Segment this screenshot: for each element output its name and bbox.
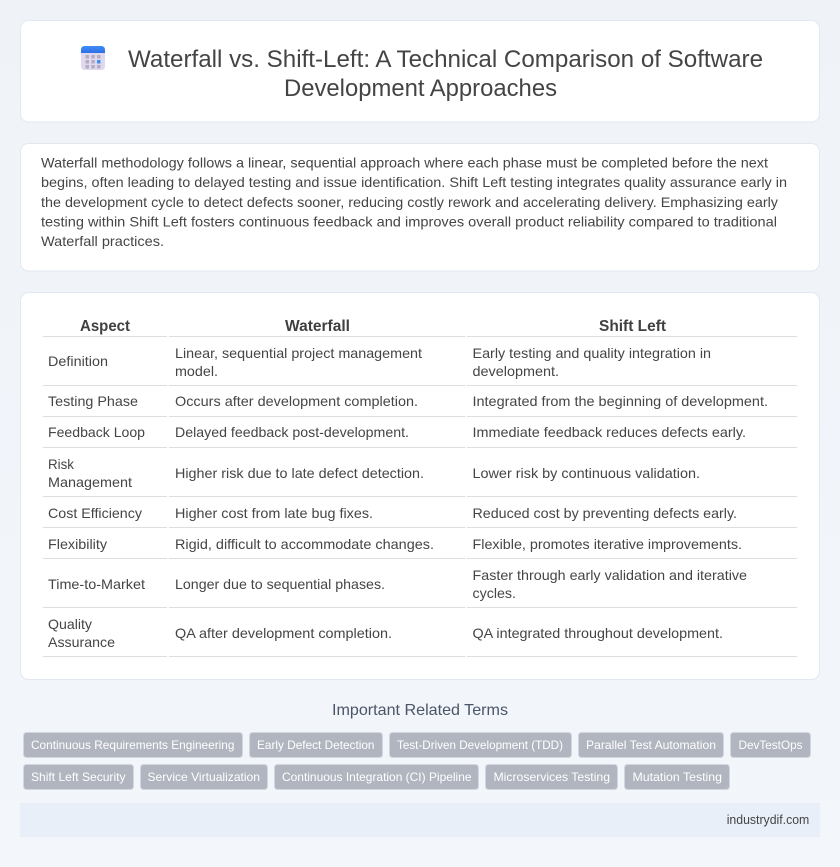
title: Waterfall vs. Shift-Left: A Technical Comparison of Software — [128, 46, 763, 73]
tag — [390, 732, 572, 758]
row: Definition: Early testing and quality integration in — [472, 345, 711, 361]
row: Risk Management — [48, 456, 700, 490]
row: Flexibility: Flexible, promotes iterative improvements. — [472, 536, 742, 552]
row: Time-to-Market — [48, 567, 747, 601]
title: Development Approaches — [284, 75, 557, 102]
row: Testing Phase: Testing Phase — [48, 393, 138, 409]
table header: Shift Left — [599, 318, 667, 335]
row: Flexibility: Rigid, difficult to accommodate changes. — [175, 536, 434, 552]
row: Quality Assurance: Assurance — [48, 634, 115, 650]
row: Definition: Definition — [48, 353, 108, 369]
row: Definition: model. — [175, 363, 218, 379]
row: Risk Management: Higher risk due to late defect detection. — [175, 465, 424, 481]
tag: DevTestOps — [738, 738, 802, 752]
row: Feedback Loop: Feedback Loop — [48, 424, 145, 440]
row: Quality Assurance: QA integrated throughout development. — [472, 625, 723, 641]
panel: introduction text: the development cycle to detect defects sooner, reducing costly rework and accelerating delivery. Emphasizing early — [41, 194, 778, 210]
panel: introduction text: begins, often leading to delayed testing and issue identification. Shift Left testing integrates quality assurance early in — [41, 174, 787, 190]
tag — [274, 764, 478, 790]
row: Definition: development. — [472, 363, 559, 379]
panel: introduction text — [20, 144, 820, 271]
tag: Mutation Testing — [632, 770, 722, 784]
tag: Service Virtualization — [148, 770, 260, 784]
row: Cost Efficiency: Reduced cost by preventing defects early. — [472, 505, 737, 521]
row: Cost Efficiency — [48, 505, 737, 521]
tag — [578, 732, 724, 758]
row: Definition — [48, 345, 711, 379]
tag: Microservices Testing — [494, 770, 610, 784]
row: Cost Efficiency: Cost Efficiency — [48, 505, 142, 521]
row: Feedback Loop: Delayed feedback post-development. — [175, 424, 409, 440]
tag: Early Defect Detection — [257, 738, 374, 752]
row: Risk Management: Management — [48, 474, 132, 490]
row: Feedback Loop: Immediate feedback reduces defects early. — [472, 424, 746, 440]
icon: calendar — [81, 46, 105, 70]
footer — [20, 803, 820, 837]
panel: introduction text: testing within Shift Left fosters continuous feedback and improves overall product reliability compared to traditional — [41, 214, 777, 230]
row: Testing Phase — [48, 393, 768, 409]
panel: comparison table — [20, 292, 820, 680]
table header: Aspect — [80, 318, 131, 335]
tag: Test-Driven Development (TDD) — [397, 738, 563, 752]
row: Quality Assurance — [48, 616, 723, 650]
tag: Shift Left Security — [31, 770, 126, 784]
tag: Parallel Test Automation — [586, 738, 716, 752]
row: Testing Phase: Occurs after development completion. — [175, 393, 418, 409]
row: Quality Assurance: Quality — [48, 616, 92, 632]
row: Definition: Linear, sequential project management — [175, 345, 422, 361]
title — [128, 46, 763, 102]
tag: Continuous Requirements Engineering — [31, 738, 234, 752]
related terms tags — [24, 732, 810, 790]
tag — [250, 732, 382, 758]
tag — [24, 732, 242, 758]
row: Time-to-Market: Time-to-Market — [48, 576, 145, 592]
row: Risk Management: Risk — [48, 456, 75, 472]
table header: Waterfall — [285, 318, 350, 335]
heading: related terms: Important Related Terms — [332, 702, 508, 719]
tag: Continuous Integration (CI) Pipeline — [282, 770, 472, 784]
panel: introduction text: Waterfall practices. — [41, 233, 164, 249]
row: Time-to-Market: Longer due to sequential phases. — [175, 576, 385, 592]
row: Quality Assurance: QA after development completion. — [175, 625, 392, 641]
row: Time-to-Market: Faster through early validation and iterative — [472, 567, 747, 583]
row: Cost Efficiency: Higher cost from late bug fixes. — [175, 505, 373, 521]
table header — [80, 318, 667, 335]
row: Testing Phase: Integrated from the beginning of development. — [472, 393, 768, 409]
tag — [624, 764, 730, 790]
tag — [486, 764, 618, 790]
tag — [24, 764, 134, 790]
row: Risk Management: Lower risk by continuous validation. — [472, 465, 700, 481]
footer: industrydif.com — [727, 812, 809, 827]
tag — [140, 764, 268, 790]
row: Flexibility: Flexibility — [48, 536, 107, 552]
panel: introduction text: Waterfall methodology follows a linear, sequential approach where each phase must be completed before the next — [41, 154, 768, 170]
row: Time-to-Market: cycles. — [472, 585, 516, 601]
panel: header — [20, 20, 820, 122]
tag — [730, 732, 810, 758]
row: Flexibility — [48, 536, 742, 552]
row: Feedback Loop — [48, 424, 746, 440]
